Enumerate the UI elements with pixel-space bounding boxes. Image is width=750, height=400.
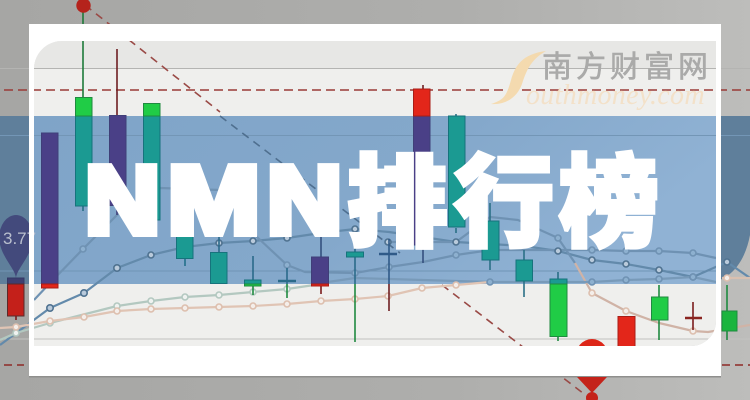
inner blue band <box>34 116 716 284</box>
inner light panel <box>34 41 716 346</box>
bottom red pin tail <box>577 377 607 400</box>
outer blue band <box>0 116 750 284</box>
title: first N: N <box>85 147 160 254</box>
title: Chinese: 行 <box>454 122 554 267</box>
title <box>85 122 659 267</box>
watermark: swoosh logo <box>491 51 546 104</box>
watermark: url: outhmoney.com <box>526 80 705 111</box>
wicks <box>16 5 727 342</box>
cross bars <box>278 254 702 318</box>
title: Chinese: 排 <box>348 122 448 267</box>
frame shadow <box>29 376 721 378</box>
marker: left balloon value <box>0 215 36 278</box>
marker: top red pin <box>76 0 91 13</box>
band coloured bodies <box>76 116 567 284</box>
moving average markers <box>13 226 730 336</box>
left outer candle <box>8 278 24 316</box>
marker: left balloon value: 3.77 <box>3 229 36 248</box>
title: second N: N <box>267 147 342 254</box>
chart grid lines <box>0 68 750 339</box>
moving average lines <box>0 188 750 345</box>
panel top strip <box>34 41 716 69</box>
marker: bottom red pin top <box>575 339 609 377</box>
watermark: Chinese name: 南方财富网 <box>542 51 712 84</box>
title: Chinese: 榜 <box>559 122 659 267</box>
bright red bodies <box>42 89 635 348</box>
bright green bodies <box>76 98 737 336</box>
title: M: M <box>168 146 260 253</box>
